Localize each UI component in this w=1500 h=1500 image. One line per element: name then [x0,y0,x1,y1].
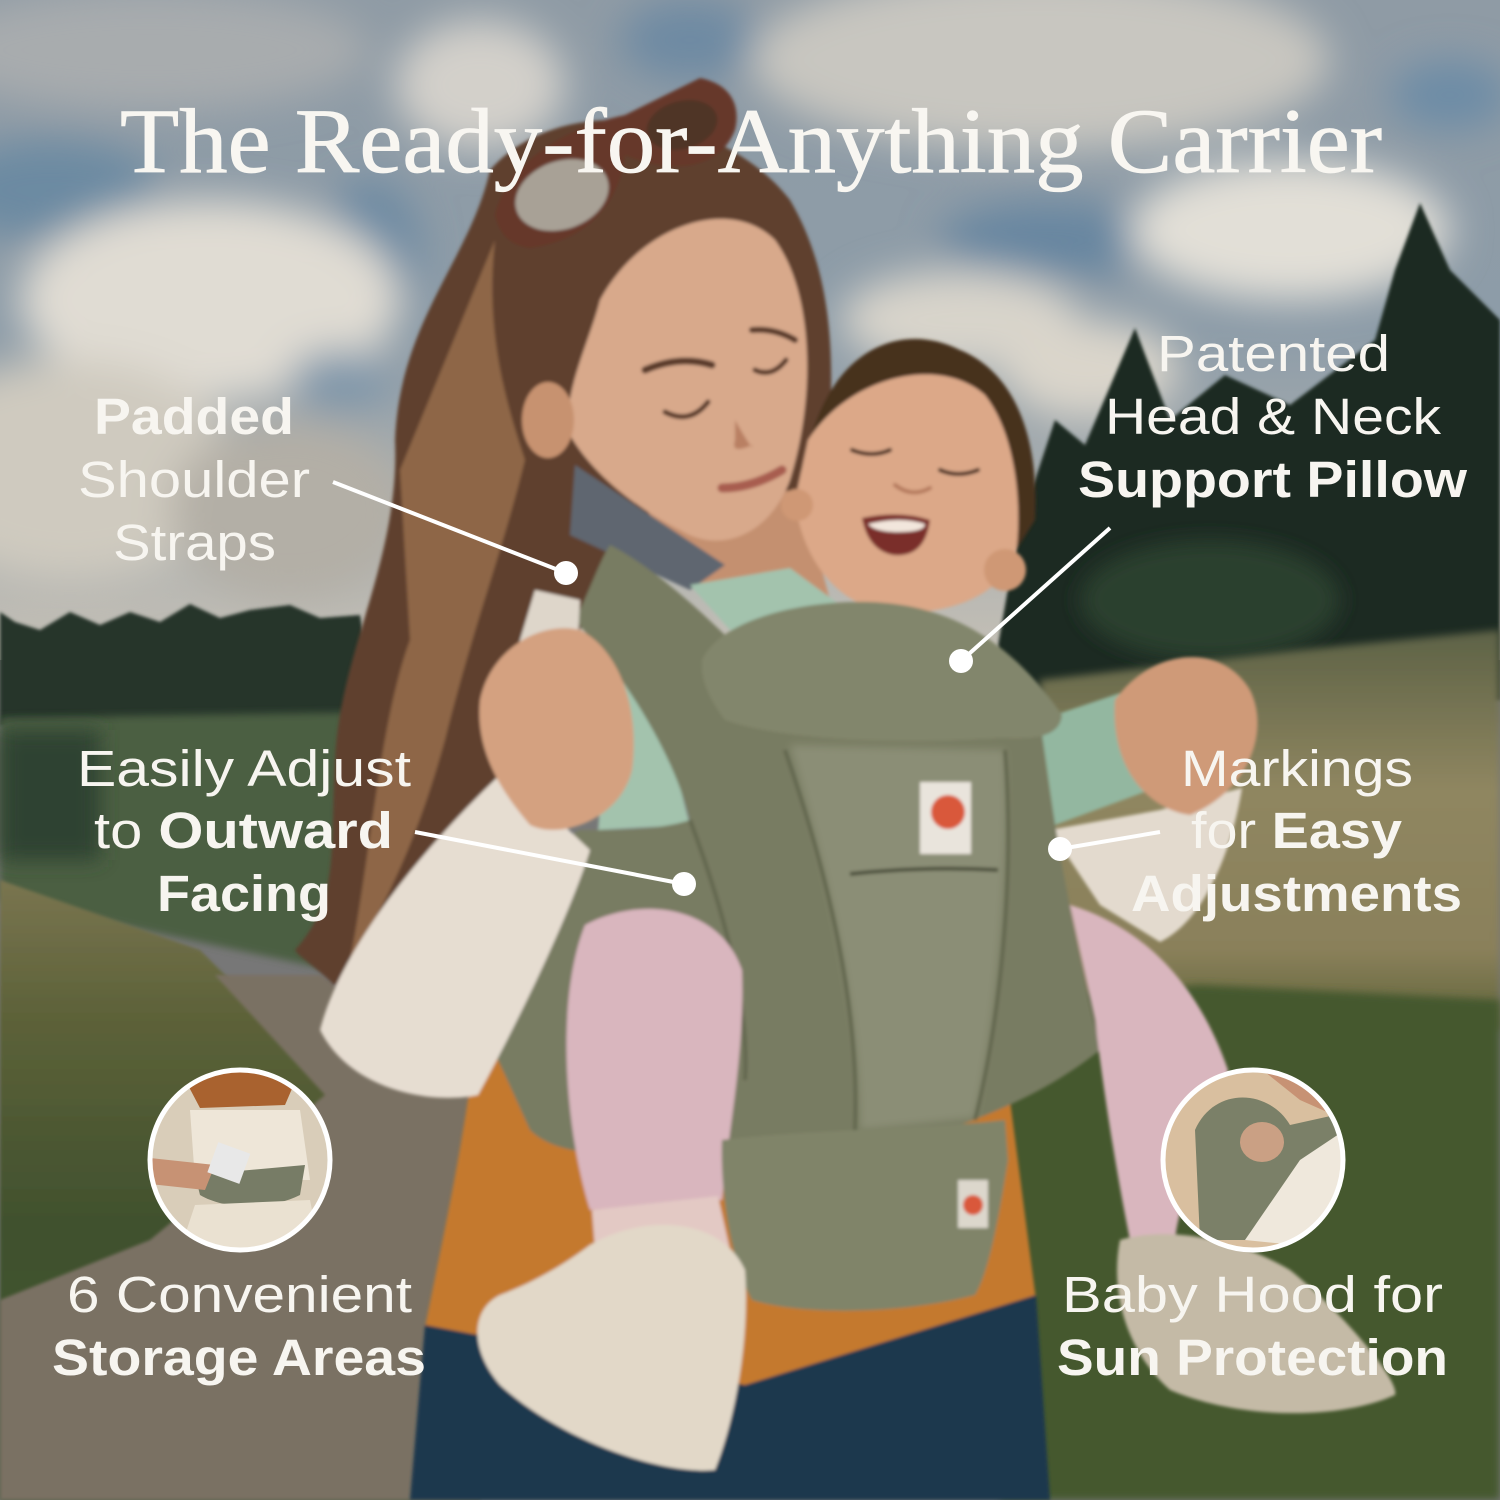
title: The Ready-for-Anything Carrier [120,90,1382,192]
carrier waffle panel [790,745,1006,1130]
label: adjust to outward facing [77,740,411,922]
label: head and neck support pillow: Support Pillow [1078,451,1467,508]
dry grass right [1040,630,1500,1030]
bootie right [1117,1234,1395,1413]
mother ear [522,382,574,458]
baby head [795,374,1018,612]
mother hands [479,628,634,830]
mother sweater sleeve left [320,770,590,1098]
scarf collar [570,465,725,590]
callout line: markings [1048,832,1160,861]
baby hair [800,339,1036,560]
mother shoulder [505,590,580,690]
carrier body [470,545,1100,1154]
sunglasses [495,78,737,248]
label: padded shoulder straps [78,388,310,571]
label: padded shoulder straps: Padded [94,388,294,445]
carrier pocket slit [850,869,998,874]
label: markings for easy adjustments: for Easy [1191,802,1403,859]
label: adjust to outward facing: to Outward [94,802,393,859]
baby eyes and nose [852,450,978,492]
label: storage areas: Storage Areas [52,1329,426,1386]
label: head and neck support pillow [1078,325,1467,508]
hip belt pouch [722,1120,1008,1311]
mother sweater right [1050,788,1242,942]
neck [640,490,830,600]
callout line: outward facing [415,832,696,896]
label: head and neck support pillow: Patented [1157,325,1390,382]
label: padded shoulder straps: Straps [113,514,276,571]
label: markings for easy adjustments: Adjustments [1131,865,1462,922]
label: padded shoulder straps: Shoulder [78,451,310,508]
label: baby hood: Sun Protection [1057,1329,1448,1386]
inset photo: storage pocket [150,1070,330,1250]
hair highlight [350,240,525,960]
label: baby hood: Baby Hood for [1062,1266,1443,1323]
label: adjust to outward facing: Easily Adjust [77,740,411,797]
photo subject: mother and baby [295,78,1395,1500]
inset photo: baby hood [1160,1070,1350,1250]
orange strap [555,890,625,965]
label: markings for easy adjustments: Markings [1181,740,1413,797]
mother face details [645,330,795,488]
leggings [410,1295,1050,1500]
carrier label [920,782,971,854]
label: baby hood [1057,1266,1448,1386]
baby mouth [862,514,930,555]
baby socks [592,1196,730,1250]
baby legs [566,909,742,1210]
baby mint top [690,568,840,630]
trees right [985,203,1500,720]
bootie left [478,1225,746,1470]
grass right [1000,985,1500,1500]
label: storage areas: 6 Convenient [67,1266,412,1323]
callout line: support pillow [949,528,1110,673]
path [0,975,480,1500]
label: storage areas [52,1266,426,1386]
treeline left [0,604,380,730]
baby ears [984,549,1026,591]
mother face [568,219,807,541]
label: markings for easy adjustments [1131,740,1462,922]
carrier seams [690,750,1008,1130]
hair [295,120,831,1020]
label: head and neck support pillow: Head & Neck [1105,388,1442,445]
orange waist layer [425,1000,1036,1388]
grass left [0,880,480,1500]
label: adjust to outward facing: Facing [157,865,331,922]
carrier hood [702,602,1062,741]
callout line: shoulder straps [333,482,578,585]
field left [0,712,380,980]
